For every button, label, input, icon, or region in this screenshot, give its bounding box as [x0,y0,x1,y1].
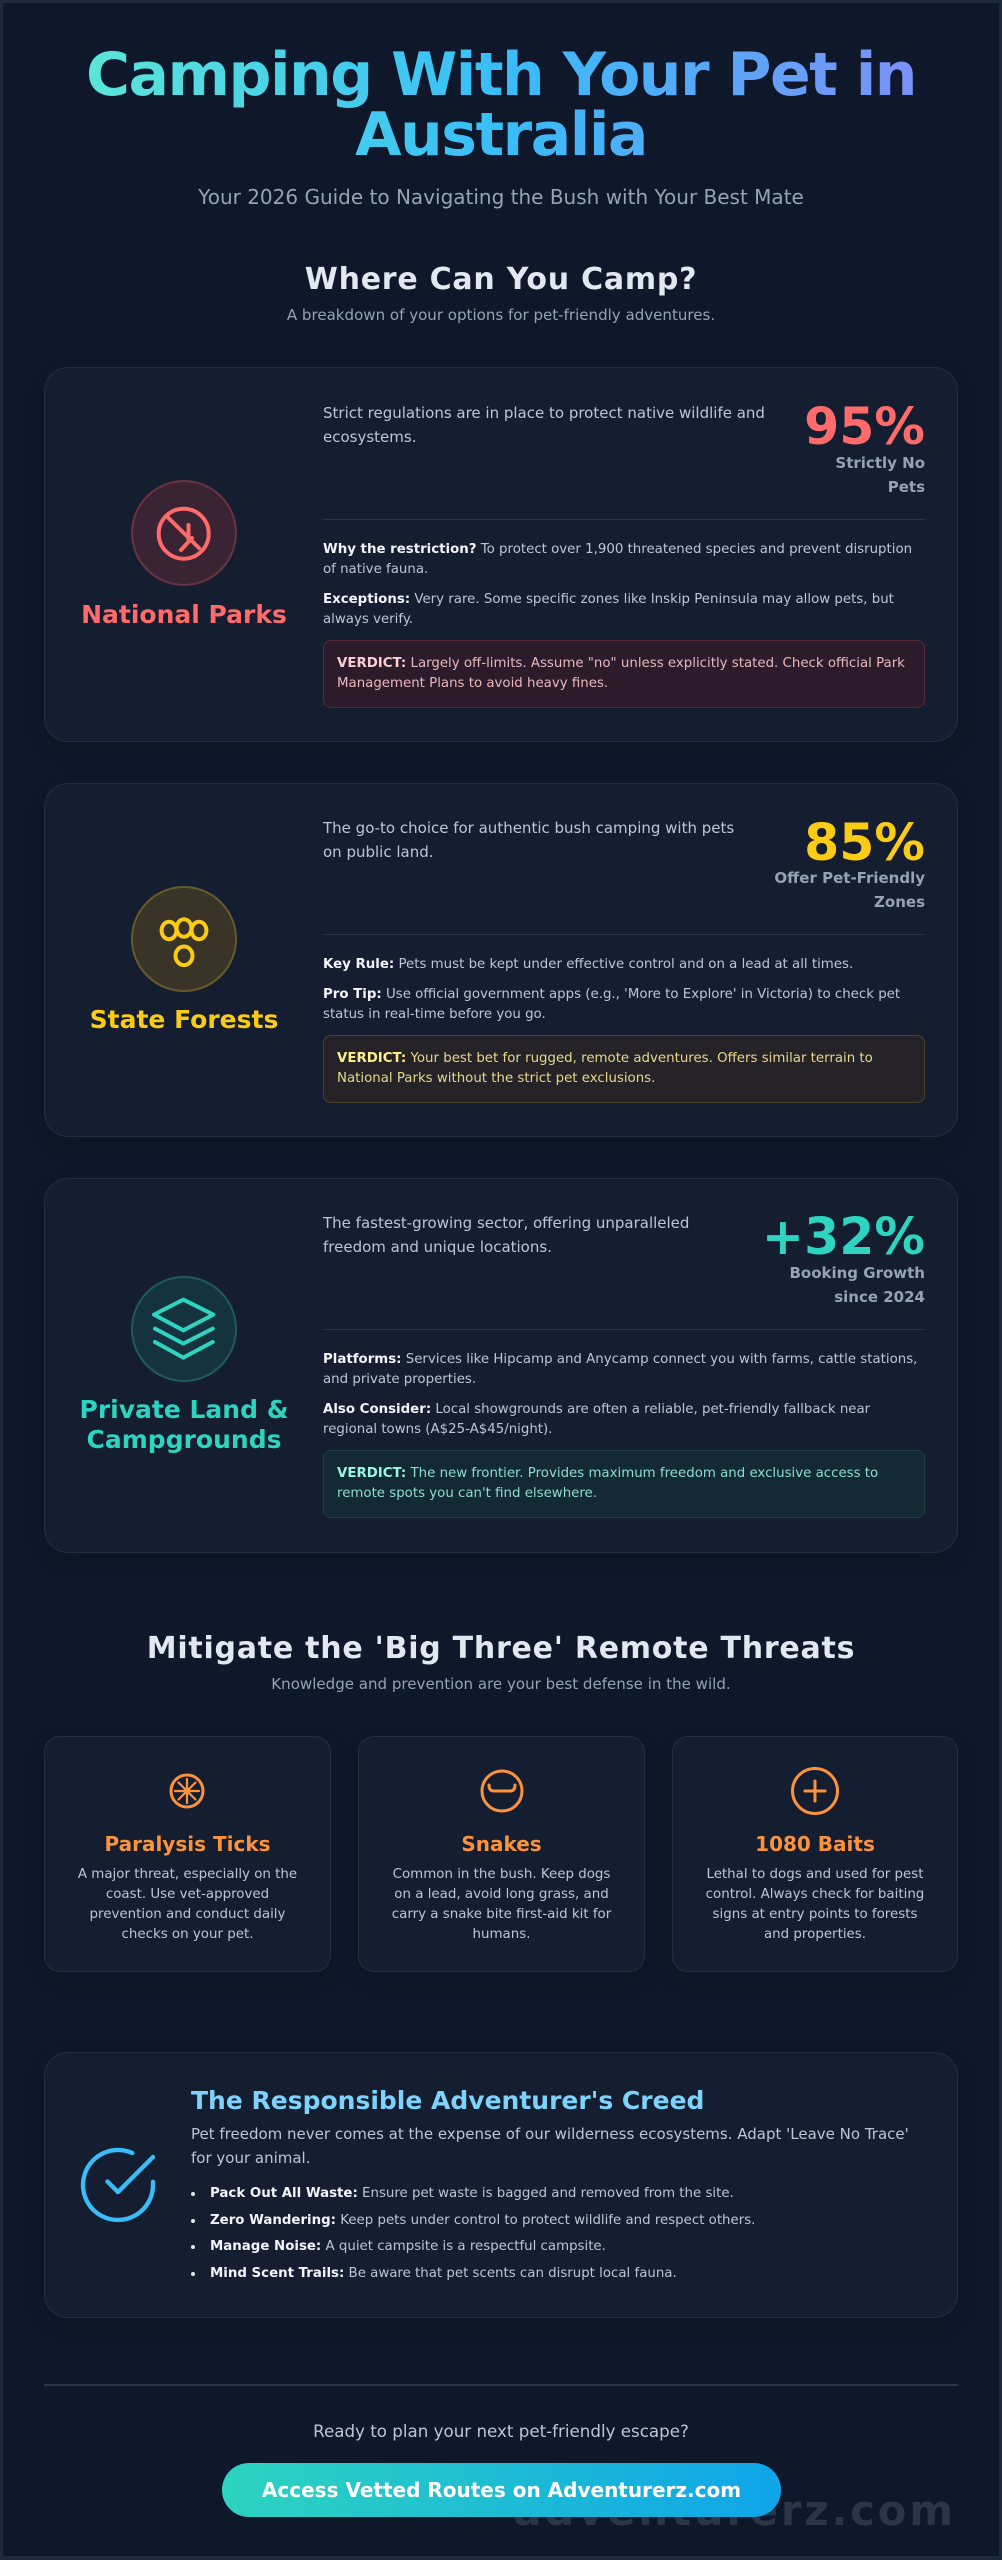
description: Common in the bush. Keep dogs [393,1867,610,1882]
detail: exceptions: Exceptions: Very rare. Some specific zones like Inskip Peninsula may allow pets, but [323,592,894,607]
intro text: The fastest-growing sector, offering unparalleled [323,1214,689,1232]
description: and properties. [764,1927,866,1942]
name: national parks: National Parks [81,600,287,629]
bullet: zero wandering: Zero Wandering: Keep pets under control to protect wildlife and respect others. [210,2213,755,2228]
stat label: Pets [888,478,925,496]
icon: check circle [80,2148,156,2222]
panel: state forests [44,783,958,1137]
detail: pro tip: status in real-time before you go. [323,1007,546,1022]
intro text: freedom and unique locations. [323,1238,552,1256]
intro text: on public land. [323,843,434,861]
verdict callout: VERDICT: Your best bet for rugged, remote adventures. Offers similar terrain to [337,1050,873,1066]
title [44,45,958,165]
verdict callout: remote spots you can't find elsewhere. [337,1486,597,1500]
bullet list [191,2186,755,2281]
detail: why the restriction: Why the restriction? To protect over 1,900 threatened species and prevent disruption [323,542,912,557]
button [222,2463,781,2517]
title: Camping With Your Pet in [86,40,916,110]
intro text [322,1214,689,1256]
name: state forests: State Forests [90,1005,278,1034]
icon: snake [480,1770,524,1812]
icon: tick [170,1774,204,1808]
description: carry a snake bite first-aid kit for [392,1907,611,1922]
panel: private land [44,1178,958,1553]
description: checks on your pet. [122,1927,253,1942]
stat label [835,454,925,496]
detail: why the restriction [323,542,912,577]
detail: platforms: and private properties. [323,1372,476,1387]
name: private land and campgrounds: Campgrounds [87,1425,281,1454]
panel: national parks [44,367,958,742]
intro text: ecosystems. [323,428,416,446]
creed intro [191,2125,909,2167]
stat label [789,1264,925,1306]
detail: pro tip: Pro Tip: Use official government apps (e.g., 'More to Explore' in Victoria) to check pet [323,987,900,1002]
panel: 1080 baits [672,1736,958,1972]
description: signs at entry points to forests [713,1907,917,1922]
panel: responsible adventurer creed [44,2052,958,2318]
icon: bait [791,1767,839,1815]
description: humans. [473,1927,530,1942]
heading: big three threats: Mitigate the 'Big Three' Remote Threats [147,1631,855,1666]
verdict callout: National Parks without the strict pet exclusions. [337,1070,655,1086]
intro text [322,819,734,861]
title: Snakes [461,1832,542,1856]
call to action text: Ready to plan your next pet-friendly escape? [313,2421,689,2441]
stat label: Booking Growth [789,1264,925,1282]
verdict callout [323,640,925,708]
detail: exceptions [323,592,894,627]
name: private land and campgrounds: Private Land & [80,1395,288,1424]
bullet: manage noise: Manage Noise: A quiet campsite is a respectful campsite. [210,2239,606,2254]
intro text: The go-to choice for authentic bush camping with pets [323,819,734,837]
verdict callout [323,1035,925,1103]
subheading: big three threats: Knowledge and prevention are your best defense in the wild. [271,1675,731,1693]
detail: pro tip [323,987,900,1022]
detail: exceptions: always verify. [323,612,413,627]
intro text [323,404,765,446]
detail: also consider [323,1402,870,1437]
verdict callout: Management Plans to avoid heavy fines. [337,676,608,690]
bullet: mind scent trails: Mind Scent Trails: Be aware that pet scents can disrupt local fauna. [210,2266,677,2281]
detail: also consider: regional towns (A$25-A$45/night). [323,1422,552,1437]
description: A major threat, especially on the [78,1867,297,1882]
stat: 95%: 95% [804,397,925,456]
detail: why the restriction: of native fauna. [323,562,428,577]
verdict callout: VERDICT: Largely off-limits. Assume "no" unless explicitly stated. Check official Park [337,656,905,670]
detail: also consider: Also Consider: Local showgrounds are often a reliable, pet-friendly fallback near [323,1402,870,1417]
detail: platforms: Platforms: Services like Hipcamp and Anycamp connect you with farms, cattle stations, [323,1352,917,1367]
description [706,1867,924,1942]
stat label: Offer Pet-Friendly [774,869,925,887]
creed intro: for your animal. [191,2149,310,2167]
icon: no pets [131,480,237,586]
stat label: Strictly No [835,454,925,472]
description: coast. Use vet-approved [106,1887,269,1902]
intro text: Strict regulations are in place to protect native wildlife and [323,404,765,422]
bullet: pack out: Pack Out All Waste: Ensure pet waste is bagged and removed from the site. [210,2186,734,2201]
description [392,1867,612,1942]
description: control. Always check for baiting [706,1887,924,1902]
creed intro: Pet freedom never comes at the expense of our wilderness ecosystems. Adapt 'Leave No Trace' [191,2125,909,2143]
heading: where can you camp: Where Can You Camp? [305,262,697,297]
description: prevention and conduct daily [90,1907,285,1922]
title: Australia [355,100,647,170]
stat: +32%: +32% [762,1207,925,1266]
subheading: where can you camp: A breakdown of your options for pet-friendly adventures. [287,306,715,324]
description [78,1867,297,1942]
description: Lethal to dogs and used for pest [706,1867,924,1882]
stat: 85%: 85% [804,812,925,872]
verdict callout [323,1450,925,1518]
description: on a lead, avoid long grass, and [394,1887,609,1902]
panel: paralysis ticks [44,1736,331,1972]
subtitle: Your 2026 Guide to Navigating the Bush with Your Best Mate [198,185,804,209]
detail: platforms [323,1352,917,1387]
stat label: since 2024 [834,1288,925,1306]
button: Access Vetted Routes on Adventurerz.com [262,2478,741,2502]
stat label: Zones [874,893,925,911]
creed title: The Responsible Adventurer's Creed [191,2086,704,2115]
verdict callout: VERDICT: The new frontier. Provides maximum freedom and exclusive access to [337,1466,878,1480]
title: Paralysis Ticks [104,1832,271,1856]
title: 1080 Baits [755,1832,875,1856]
name: private land and campgrounds [80,1395,288,1454]
panel: snakes [358,1736,645,1972]
stat label [774,869,925,911]
watermark: adventurerz.com [513,2486,956,2534]
icon: paw [131,886,237,992]
icon: layers [131,1276,237,1382]
detail: key rule: Key Rule: Pets must be kept under effective control and on a lead at all times. [323,957,853,972]
